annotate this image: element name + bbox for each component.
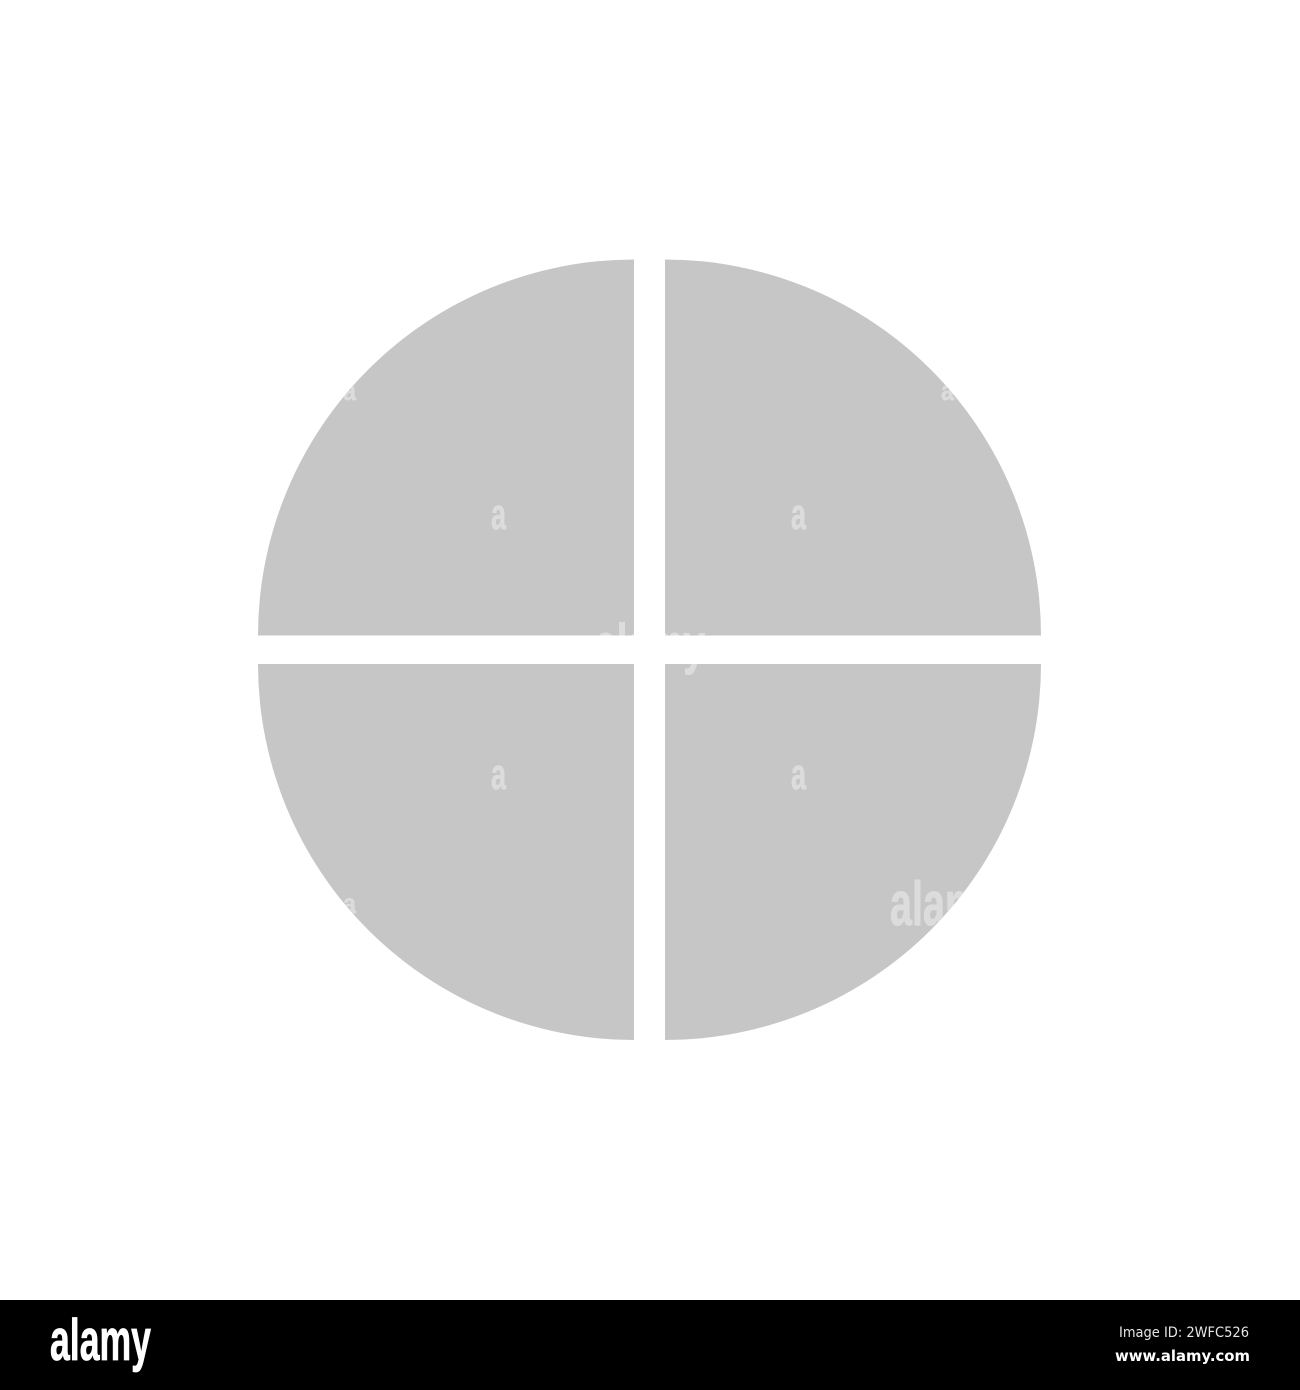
watermark letter: top left: a bbox=[491, 490, 506, 539]
watermark letter: edge upper left: a bbox=[343, 375, 356, 406]
footer bar bbox=[0, 1300, 1300, 1390]
quadrant: top right bbox=[665, 260, 1041, 636]
footer logo: alamy bbox=[50, 1308, 151, 1373]
quadrant: top left bbox=[258, 260, 634, 636]
quadrant: bottom left bbox=[258, 664, 634, 1040]
watermark word: centre: alamy bbox=[595, 612, 705, 675]
image id: Image ID: 2WFC526 bbox=[1119, 1325, 1249, 1341]
watermark word: lower right: alamy bbox=[890, 870, 1002, 939]
quadrant: bottom right bbox=[665, 664, 1041, 1040]
website url: www.alamy.com bbox=[1115, 1347, 1250, 1365]
watermark letter: top right: a bbox=[791, 490, 806, 539]
watermark letter: bottom right: a bbox=[791, 750, 806, 799]
watermark letter: bottom left: a bbox=[491, 750, 506, 799]
watermark letter: edge upper right: a bbox=[941, 375, 954, 406]
watermark letter: edge lower left: a bbox=[343, 888, 356, 919]
watermarks over the circle bbox=[343, 375, 1002, 939]
pie chart: circle divided into four equal quadrants bbox=[258, 260, 1041, 1040]
